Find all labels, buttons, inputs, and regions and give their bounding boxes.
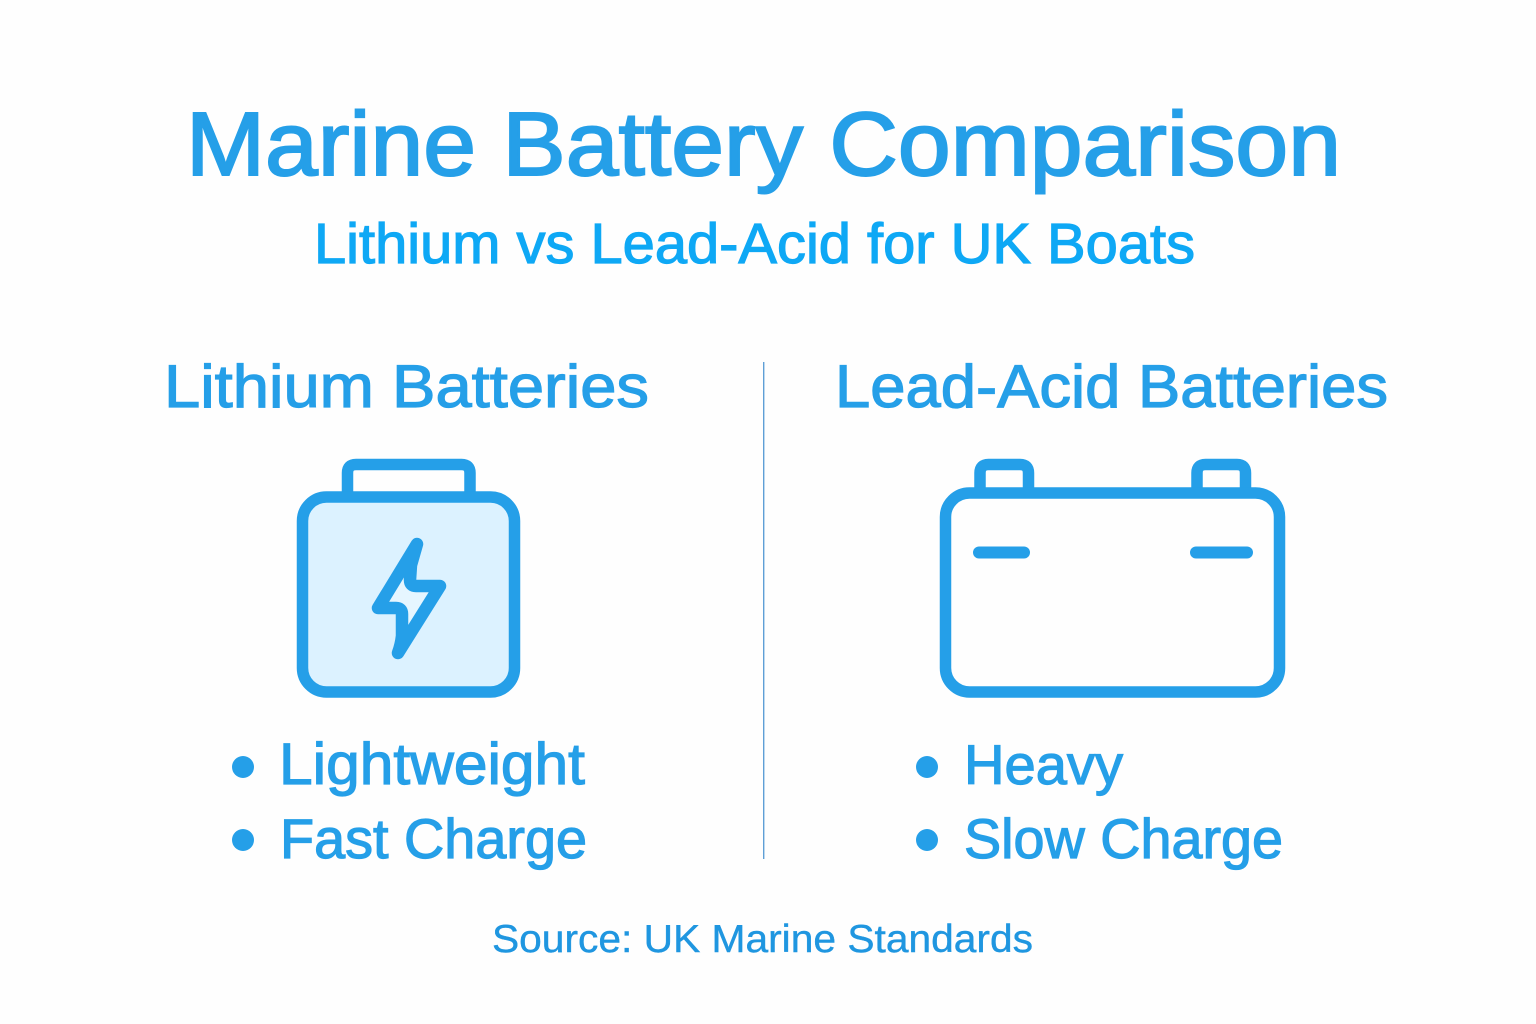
bullet list: lead-acid [916, 733, 1283, 870]
heading: lead-acid batteries: Lead-Acid Batteries [835, 353, 1388, 420]
panel: lithium batteries [164, 353, 649, 870]
panel: lead-acid batteries [835, 353, 1388, 870]
source note: Source: UK Marine Standards [492, 918, 1033, 961]
bullet list: lead-acid: Heavy [964, 733, 1123, 796]
icon: lead-acid battery [946, 464, 1280, 692]
bullet list: lithium: Lightweight [279, 732, 585, 797]
icon: lithium battery [302, 464, 514, 692]
bullet list: lithium: Fast Charge [280, 807, 587, 870]
bullet list: lithium [232, 732, 587, 870]
bullet list: lead-acid: Slow Charge [964, 807, 1283, 870]
divider [763, 362, 764, 859]
title: Marine Battery Comparison [186, 95, 1341, 195]
heading: lithium batteries: Lithium Batteries [164, 353, 649, 420]
subtitle: Lithium vs Lead-Acid for UK Boats [314, 212, 1195, 276]
